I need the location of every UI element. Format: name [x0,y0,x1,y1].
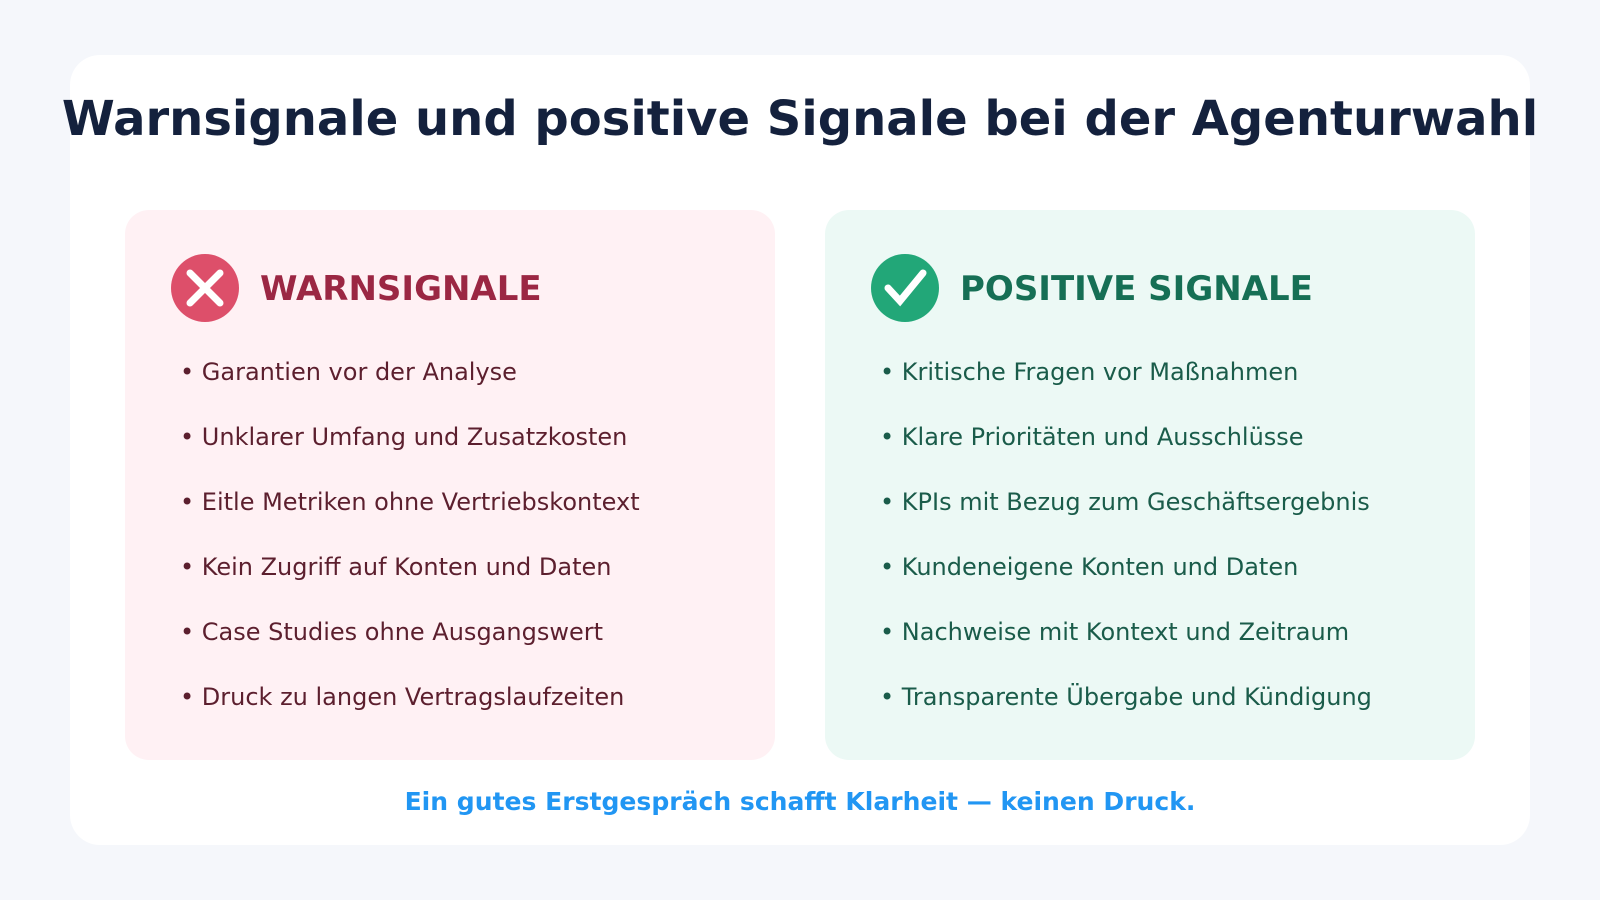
list: warnings [180,358,640,711]
list: positives: • Klare Prioritäten und Ausschlüsse [880,423,1304,451]
list: warnings: • Garantien vor der Analyse [180,358,517,386]
list: positives: • Kundeneigene Konten und Daten [880,553,1298,581]
list: warnings: • Kein Zugriff auf Konten und Daten [180,553,612,581]
footer note: Ein gutes Erstgespräch schafft Klarheit — keinen Druck. [405,787,1195,816]
list: warnings: • Case Studies ohne Ausgangswert [180,618,603,646]
list: positives [880,358,1372,711]
panel: warnsignale [125,210,775,760]
list: positives: • Nachweise mit Kontext und Zeitraum [880,618,1349,646]
icon: check [871,254,939,322]
list: warnings: • Druck zu langen Vertragslaufzeiten [180,683,624,711]
list: positives: • KPIs mit Bezug zum Geschäftsergebnis [880,488,1370,516]
list: warnings: • Eitle Metriken ohne Vertriebskontext [180,488,640,516]
heading: positive signale: POSITIVE SIGNALE [960,269,1313,309]
list: positives: • Kritische Fragen vor Maßnahmen [880,358,1298,386]
list: positives: • Transparente Übergabe und Kündigung [880,682,1372,711]
list: warnings: • Unklarer Umfang und Zusatzkosten [180,423,627,451]
panel: positive signale [825,210,1475,760]
title: Warnsignale und positive Signale bei der Agenturwahl [62,91,1538,147]
heading: warnsignale: WARNSIGNALE [260,269,542,309]
icon: cross [171,254,239,322]
